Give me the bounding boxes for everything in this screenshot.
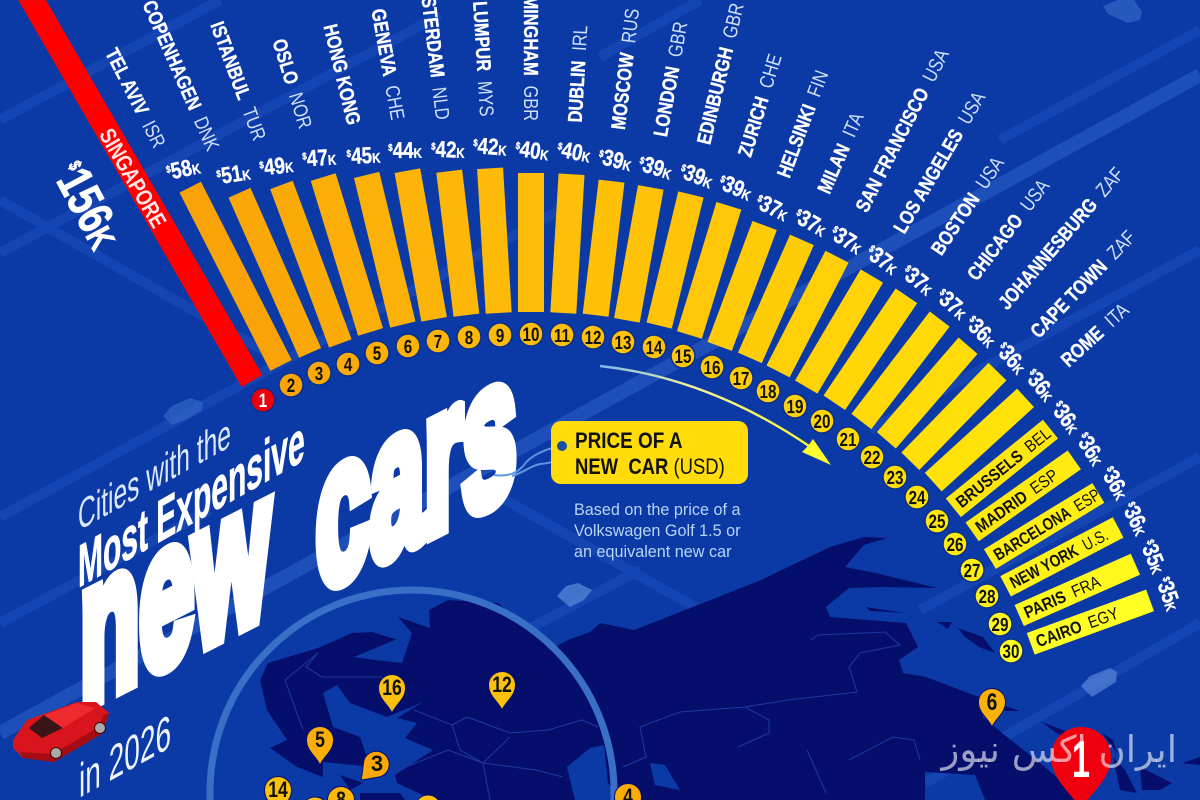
rank 23: Cape Town	[873, 222, 1145, 500]
rank 20: Boston	[800, 148, 1015, 444]
pin: rank 4	[614, 784, 642, 800]
rank 20: Boston: K	[918, 281, 935, 299]
rank 20: Boston: $	[903, 263, 913, 274]
pin: rank 12: 12	[492, 673, 512, 698]
rank 26: Madrid: $	[1079, 430, 1091, 440]
rank 28: New York: 28	[978, 585, 996, 607]
rank 27: Barcelona: K	[1110, 488, 1129, 504]
rank 15: Zurich: K	[739, 186, 754, 204]
rank 15: Zurich: ZURICHCHE	[733, 51, 786, 159]
pin: rank 5	[306, 726, 334, 765]
value: Singapore $156k: 156	[46, 159, 124, 241]
rank 29: Paris: 29	[992, 613, 1008, 635]
rank 28: New York: 36	[1119, 502, 1150, 532]
rank 25: Brussels: 36	[1048, 400, 1081, 432]
note text: Based on the price of a	[574, 501, 740, 519]
rank 4: Istanbul: K	[284, 159, 295, 176]
faded car: top right	[1103, 0, 1142, 23]
pin: rank partly cropped	[302, 797, 328, 800]
faded car: centre	[557, 583, 592, 607]
rank 3: Copenhagen: COPENHAGEN DNK	[138, 0, 224, 154]
rank 18: San Francisco: K	[848, 240, 864, 258]
rank 14: Edinburgh: $	[680, 162, 688, 174]
rank 27: Barcelona: BARCELONAESP	[991, 486, 1104, 565]
rank 6: Hong Kong: HONG KONG	[319, 22, 366, 127]
rank 6: Hong Kong: $	[346, 148, 351, 159]
rank 6: Hong Kong: 6	[404, 335, 412, 357]
rank 28: New York: $	[1126, 500, 1138, 509]
rank 6: Hong Kong	[313, 20, 431, 362]
rank 14: Edinburgh: EDINBURGHGBR	[692, 1, 748, 147]
pin: rank 16: 16	[382, 676, 402, 701]
rank 18: San Francisco: 18	[760, 380, 777, 402]
callout: price of a new car	[551, 421, 748, 484]
rank 13: London	[604, 19, 700, 358]
rank 17: Milan: 37	[793, 206, 824, 238]
rank 2: Tel Aviv	[101, 36, 316, 405]
rank 20: Boston: 37	[900, 263, 932, 296]
rank 30: Cairo	[994, 573, 1186, 672]
rank 27: Barcelona: 27	[963, 559, 981, 581]
pin: rank 16	[378, 674, 406, 713]
pin: rank 12	[488, 672, 516, 710]
rank 9: Kuala Lumpur: 42	[477, 134, 499, 160]
title line: Cities with the: Cities with the	[78, 409, 231, 540]
rank 15: Zurich	[662, 49, 794, 375]
rank 26: Madrid: K	[1086, 453, 1105, 470]
rank 15: Zurich: 15	[675, 345, 692, 367]
rank 18: San Francisco: 37	[829, 223, 860, 255]
rank 22: Johannesburg: 22	[864, 446, 880, 468]
rank 10: Birmingham: $	[515, 140, 521, 152]
pin: rank 8	[328, 786, 354, 800]
rank 5: Oslo: K	[327, 151, 337, 168]
rank 2: Tel Aviv: 58	[169, 155, 195, 184]
rank 29: Paris: $	[1145, 538, 1156, 546]
rank 29: Paris: PARISFRA	[1022, 573, 1104, 622]
rank 8: Amsterdam: K	[456, 144, 466, 161]
rank 29: Paris: 35	[1137, 541, 1168, 570]
rank 3: Copenhagen	[138, 0, 344, 391]
rank 24: Rome: K	[1037, 388, 1056, 405]
rank 8: Amsterdam: 8	[465, 326, 474, 348]
rank 23: Cape Town: CAPE TOWNZAF	[1025, 225, 1140, 342]
rank 20: Boston: 20	[814, 410, 830, 432]
rank 24: Rome: 24	[908, 486, 926, 508]
rank 7: Geneva	[361, 5, 461, 356]
rank 30: Cairo: 30	[1003, 640, 1019, 662]
rank 4: Istanbul: ISTANBUL TUR	[206, 18, 271, 143]
rank 19: Los Angeles: LOS ANGELESUSA	[888, 87, 990, 237]
rank 21: Chicago: K	[951, 305, 969, 324]
rank 8: Amsterdam: $	[431, 141, 436, 152]
rank 2: Tel Aviv: $	[165, 164, 172, 175]
rank 28: New York	[968, 497, 1155, 618]
rank 6: Hong Kong: 45	[351, 143, 373, 169]
rank 21: Chicago: $	[937, 287, 948, 298]
rank 13: London: K	[660, 165, 674, 183]
rank 11: Dublin: 11	[554, 324, 570, 346]
rank 5: Oslo: 5	[373, 342, 382, 364]
rank 4: Istanbul	[204, 13, 373, 382]
watermark: ایران اکس نیوز	[940, 728, 1177, 771]
rank 15: Zurich: 39	[719, 171, 748, 203]
rank 14: Edinburgh: 14	[645, 336, 663, 358]
rank 5: Oslo: OSLO NOR	[268, 36, 317, 131]
rank 30: Cairo: CAIROEGY	[1034, 605, 1122, 651]
rank 22: Johannesburg: $	[967, 314, 978, 325]
rank 7: Geneva: 44	[393, 138, 414, 163]
rank 27: Barcelona	[952, 461, 1135, 592]
rank 22: Johannesburg: JOHANNESBURGZAF	[993, 163, 1128, 314]
rank 16: Helsinki: HELSINKIFIN	[772, 67, 833, 181]
rank 9: Kuala Lumpur: K	[498, 142, 508, 159]
rank 21: Chicago: CHICAGOUSA	[962, 174, 1054, 285]
rank 16: Helsinki	[691, 65, 840, 387]
rank 7: Geneva: K	[414, 145, 423, 161]
rank 7: Geneva: GENEVA CHE	[367, 7, 410, 122]
map: Europe and Asia	[260, 537, 1200, 800]
value: Singapore $156k: $	[64, 158, 84, 174]
rank 19: Los Angeles: K	[883, 260, 900, 279]
rank 30: Cairo: $	[1160, 575, 1172, 583]
rank 16: Helsinki: $	[756, 193, 765, 204]
rank 28: New York: NEW YORKU.S.	[1007, 526, 1112, 593]
rank 22: Johannesburg	[850, 159, 1134, 480]
rank 17: Milan: K	[813, 222, 829, 240]
faded van: right	[1081, 668, 1117, 697]
rank 23: Cape Town: 23	[887, 466, 903, 488]
pin: rank 1: 1	[1072, 731, 1090, 789]
pin: rank 3	[361, 751, 389, 780]
rank 24: Rome: 36	[1022, 368, 1055, 400]
rank 27: Barcelona: 36	[1098, 466, 1130, 497]
rank 12: Moscow: 12	[585, 326, 601, 348]
label: Singapore: SINGAPORE	[94, 124, 171, 233]
rank 26: Madrid: 36	[1073, 432, 1105, 463]
rank 29: Paris: K	[1147, 563, 1165, 577]
rank 23: Cape Town: K	[1009, 361, 1027, 378]
map ring	[210, 590, 614, 800]
rank 19: Los Angeles	[773, 84, 997, 428]
title line: new: new	[80, 425, 270, 752]
rank 16: Helsinki: 37	[755, 191, 785, 223]
rank 6: Hong Kong: K	[372, 149, 382, 166]
rank 25: Brussels: K	[1062, 421, 1081, 438]
rank 28: New York: K	[1130, 524, 1148, 539]
rank 13: London: LONDONGBR	[649, 20, 692, 138]
rank 1 bar: Singapore	[0, 0, 279, 417]
rank 3: Copenhagen: K	[241, 166, 253, 184]
rank 15: Zurich: $	[719, 173, 727, 185]
rank 24: Rome: $	[1027, 367, 1039, 377]
rank 13: London: 13	[615, 331, 631, 353]
rank 25: Brussels: $	[1054, 399, 1065, 409]
arrow: rank direction	[600, 366, 831, 465]
title line: cars: cars	[316, 304, 516, 636]
callout text second line: NEW CAR (USD)	[575, 456, 725, 479]
rank 7: Geneva: 7	[434, 330, 442, 352]
rank 21: Chicago: 21	[839, 428, 857, 450]
rank 10: Birmingham: K	[539, 146, 550, 164]
rank 5: Oslo	[264, 32, 401, 370]
rank 27: Barcelona: $	[1104, 464, 1116, 474]
rank 9: Kuala Lumpur	[459, 0, 521, 348]
rank 12: Moscow: 39	[600, 145, 626, 175]
icon: red sports car	[13, 702, 109, 762]
rank 13: London: 39	[640, 152, 667, 182]
value: Singapore $156k: K	[78, 220, 123, 256]
rank 11: Dublin: DUBLINIRL	[563, 25, 592, 123]
rank 14: Edinburgh: 39	[680, 160, 709, 191]
rank 17: Milan: $	[794, 207, 804, 219]
rank 22: Johannesburg: K	[980, 333, 998, 351]
rank 20: Boston: BOSTONUSA	[926, 152, 1009, 259]
note text: an equivalent new car	[574, 543, 732, 561]
pin: rank 1	[1051, 727, 1111, 800]
rank 30: Cairo: K	[1161, 600, 1179, 614]
rank 12: Moscow: MOSCOWRUS	[606, 7, 643, 131]
rank 25: Brussels	[916, 395, 1087, 544]
rank 18: San Francisco: $	[831, 224, 840, 235]
rank 23: Cape Town: 36	[994, 341, 1026, 373]
rank 12: Moscow: $	[598, 148, 605, 160]
rank 25: Brussels: BRUSSELSBEL	[953, 425, 1055, 512]
rank 8: Amsterdam: 42	[435, 137, 457, 163]
rank 19: Los Angeles: $	[867, 243, 877, 255]
rank 7: Geneva: $	[388, 142, 393, 153]
pin: rank 6	[978, 688, 1006, 727]
pin: rank partly cropped centre	[415, 795, 441, 800]
pin: rank 3: 3	[371, 751, 383, 776]
rank 4: Istanbul: 4	[344, 353, 353, 375]
title	[78, 304, 516, 800]
rank 18: San Francisco	[746, 42, 961, 412]
rank 23: Cape Town: $	[998, 340, 1009, 351]
rank 17: Milan: 17	[733, 367, 749, 389]
rank 16: Helsinki: 16	[703, 356, 721, 378]
rank 9: Kuala Lumpur: 9	[496, 324, 504, 346]
rank 10: Birmingham: 10	[523, 323, 539, 345]
note text: Volkswagen Golf 1.5 or	[574, 522, 741, 540]
rank 19: Los Angeles: 37	[865, 242, 896, 275]
rank 24: Rome: ROMEITA	[1056, 298, 1134, 371]
rank 10: Birmingham	[513, 0, 551, 346]
rank 11: Dublin: $	[557, 141, 563, 152]
rank 2: Tel Aviv: 2	[287, 374, 295, 396]
rank 2: Tel Aviv: TEL AVIV ISR	[101, 44, 171, 151]
rank 29: Paris	[982, 536, 1172, 646]
rank 26: Madrid: MADRIDESP	[973, 466, 1062, 537]
rank 12: Moscow	[574, 6, 652, 352]
rank 26: Madrid: 26	[947, 533, 963, 555]
rank 12: Moscow: K	[621, 157, 633, 175]
rank 14: Edinburgh	[634, 0, 756, 364]
pin: rank 6: 6	[987, 688, 997, 716]
callout text: PRICE OF A	[575, 429, 683, 453]
rank 30: Cairo: 35	[1152, 578, 1183, 606]
faded car: left	[163, 398, 203, 425]
rank 9: Kuala Lumpur: $	[473, 137, 478, 149]
rank 2: Tel Aviv: K	[190, 160, 203, 178]
rank 24: Rome	[895, 293, 1139, 520]
rank 22: Johannesburg: 36	[963, 314, 996, 347]
rank 13: London: $	[638, 155, 646, 166]
rank 11: Dublin: K	[580, 148, 592, 166]
rank 4: Istanbul: $	[259, 159, 264, 171]
rank 10: Birmingham: 40	[518, 137, 542, 165]
pin: rank 14	[264, 776, 292, 800]
rank 21: Chicago: 37	[934, 287, 966, 319]
rank 11: Dublin	[544, 24, 601, 348]
rank 5: Oslo: 47	[306, 145, 329, 172]
rank 5: Oslo: $	[302, 151, 307, 162]
callout string	[494, 447, 565, 476]
rank 1 bar: Singapore: 1	[259, 389, 268, 411]
rank 21: Chicago	[826, 171, 1060, 462]
rank 17: Milan	[719, 106, 876, 399]
rank 14: Edinburgh: K	[701, 173, 715, 192]
rank 18: San Francisco: SAN FRANCISCOUSA	[850, 44, 954, 216]
rank 8: Amsterdam	[408, 0, 491, 351]
rank 3: Copenhagen: $	[216, 168, 222, 180]
rank 17: Milan: MILANITA	[812, 108, 868, 197]
rank 16: Helsinki: K	[775, 206, 790, 225]
rank 25: Brussels: 25	[929, 510, 946, 532]
rank 19: Los Angeles: 19	[786, 395, 804, 417]
rank 4: Istanbul: 49	[263, 153, 286, 181]
rank 3: Copenhagen: 51	[219, 161, 244, 189]
pin: rank 5: 5	[315, 728, 325, 753]
note text	[574, 501, 741, 561]
rank 11: Dublin: 40	[559, 138, 585, 166]
rank 3: Copenhagen: 3	[315, 362, 323, 384]
title line: Most Expensive: Most Expensive	[78, 407, 305, 601]
rank 26: Madrid	[934, 427, 1112, 567]
